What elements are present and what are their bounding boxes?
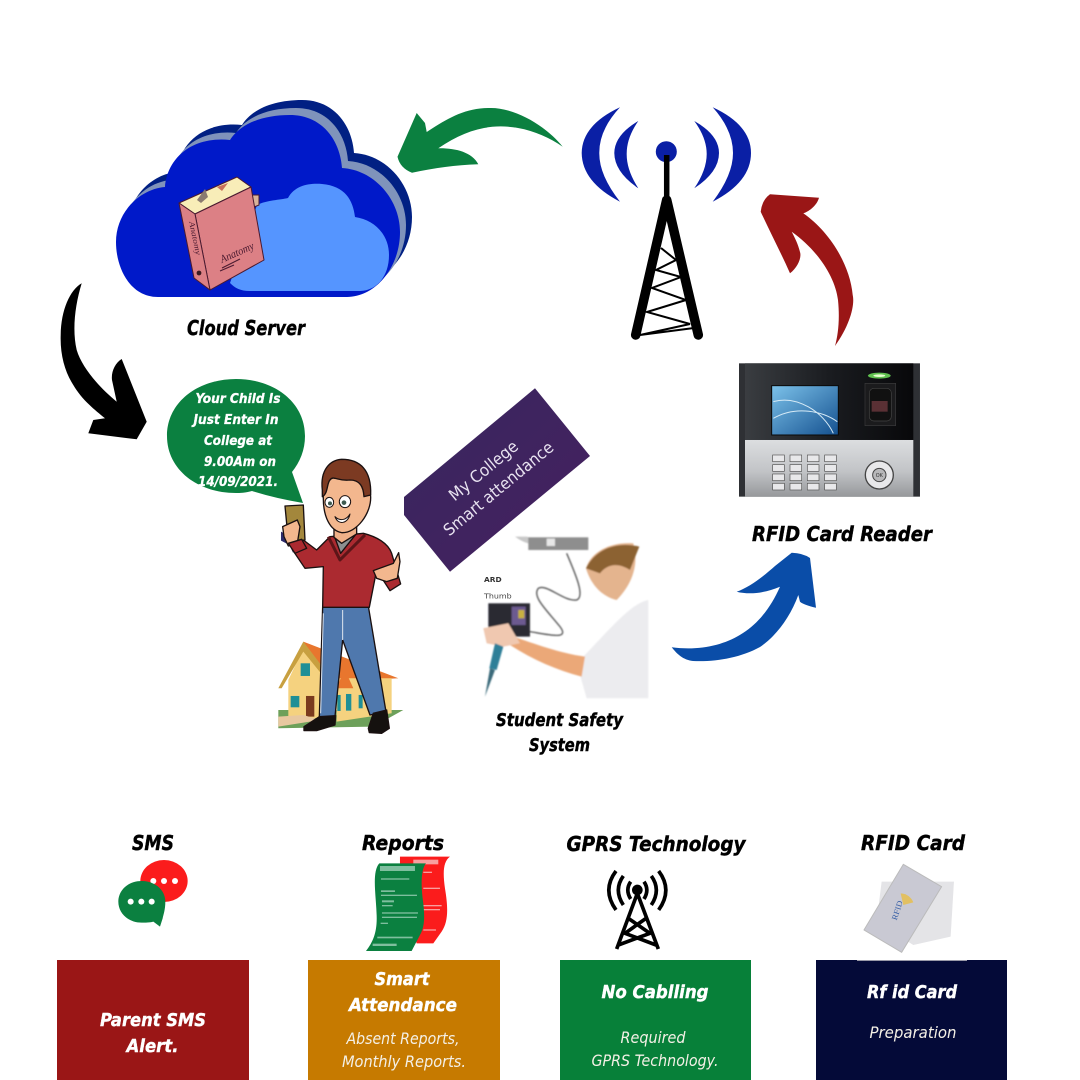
arrow: dark red, reader to tower <box>761 194 853 346</box>
speech bubble: 14/09/2021. <box>198 474 278 490</box>
icon: RFID cards: RFID <box>890 899 905 921</box>
panel: No Cabling: Required <box>620 1028 686 1047</box>
arrow: green, tower to cloud <box>398 108 563 173</box>
panel: Parent SMS Alert: Parent SMS <box>100 1010 206 1031</box>
man <box>281 459 401 733</box>
navigation pad: OK <box>876 473 884 479</box>
photo: student using thumb device: Thumb <box>483 591 512 600</box>
panel: Parent SMS Alert <box>57 960 249 1080</box>
panel: No Cabling <box>560 960 751 1080</box>
illustration: parent with phone and house <box>278 459 403 733</box>
speech bubble <box>167 379 305 503</box>
icon: GPRS tower <box>609 871 666 949</box>
arrow: black, cloud to parent <box>61 283 147 439</box>
keypad <box>773 455 836 490</box>
heading: Reports: Reports <box>362 831 444 855</box>
panel: Smart Attendance: Attendance <box>347 995 457 1016</box>
photo: student using thumb device: ARD <box>484 575 502 584</box>
heading: SMS: SMS <box>132 831 174 855</box>
speech bubble: Your Child Is <box>196 391 280 407</box>
heading: GPRS Technology: GPRS Technology <box>566 832 746 856</box>
arrow: blue, student to reader <box>672 553 816 661</box>
panel: Smart Attendance: Monthly Reports. <box>342 1052 466 1071</box>
speech bubble: 9.00Am on <box>204 454 276 470</box>
banner: My College Smart attendance: Smart attendance <box>440 438 557 540</box>
label: Student Safety System <box>496 710 624 756</box>
icon: signal tower <box>582 107 751 335</box>
reader screen <box>772 386 838 435</box>
icon: book <box>179 177 264 290</box>
label: Student Safety System: System <box>529 735 590 756</box>
panel: Rf id Card: Preparation <box>870 1023 956 1042</box>
label: RFID Card Reader: RFID Card Reader <box>752 522 933 546</box>
icon: book: Anatomy <box>217 240 256 266</box>
panel: No Cabling: No Cablling <box>602 982 709 1003</box>
panel: Smart Attendance <box>308 960 500 1080</box>
panel: No Cabling: GPRS Technology. <box>592 1051 718 1070</box>
icon: SMS chat bubbles <box>118 860 188 927</box>
label: Student Safety System: Student Safety <box>496 710 624 731</box>
panel: Parent SMS Alert: Alert. <box>125 1036 178 1057</box>
device: RFID card reader <box>739 363 920 497</box>
panel: Rf id Card: Rf id Card <box>867 982 958 1003</box>
icon: RFID cards <box>864 864 954 952</box>
panel: Smart Attendance: Absent Reports, <box>346 1029 460 1048</box>
icon: report sheets <box>366 857 450 951</box>
label: Cloud Server: Cloud Server <box>187 316 306 340</box>
banner: My College Smart attendance: My College <box>445 437 522 505</box>
icon: book: Anatomy <box>187 219 203 256</box>
panel: Smart Attendance: Smart <box>374 969 431 990</box>
panel: Rf id Card <box>816 960 1007 1080</box>
house <box>278 642 403 728</box>
photo: student using thumb device <box>483 537 648 698</box>
speech bubble: Just Enter In <box>191 412 278 428</box>
speech bubble: College at <box>204 433 272 449</box>
navigation pad <box>865 461 893 489</box>
icon: cloud server <box>116 100 412 297</box>
banner: My College Smart attendance <box>404 388 590 572</box>
heading: RFID Card: RFID Card <box>861 831 966 855</box>
